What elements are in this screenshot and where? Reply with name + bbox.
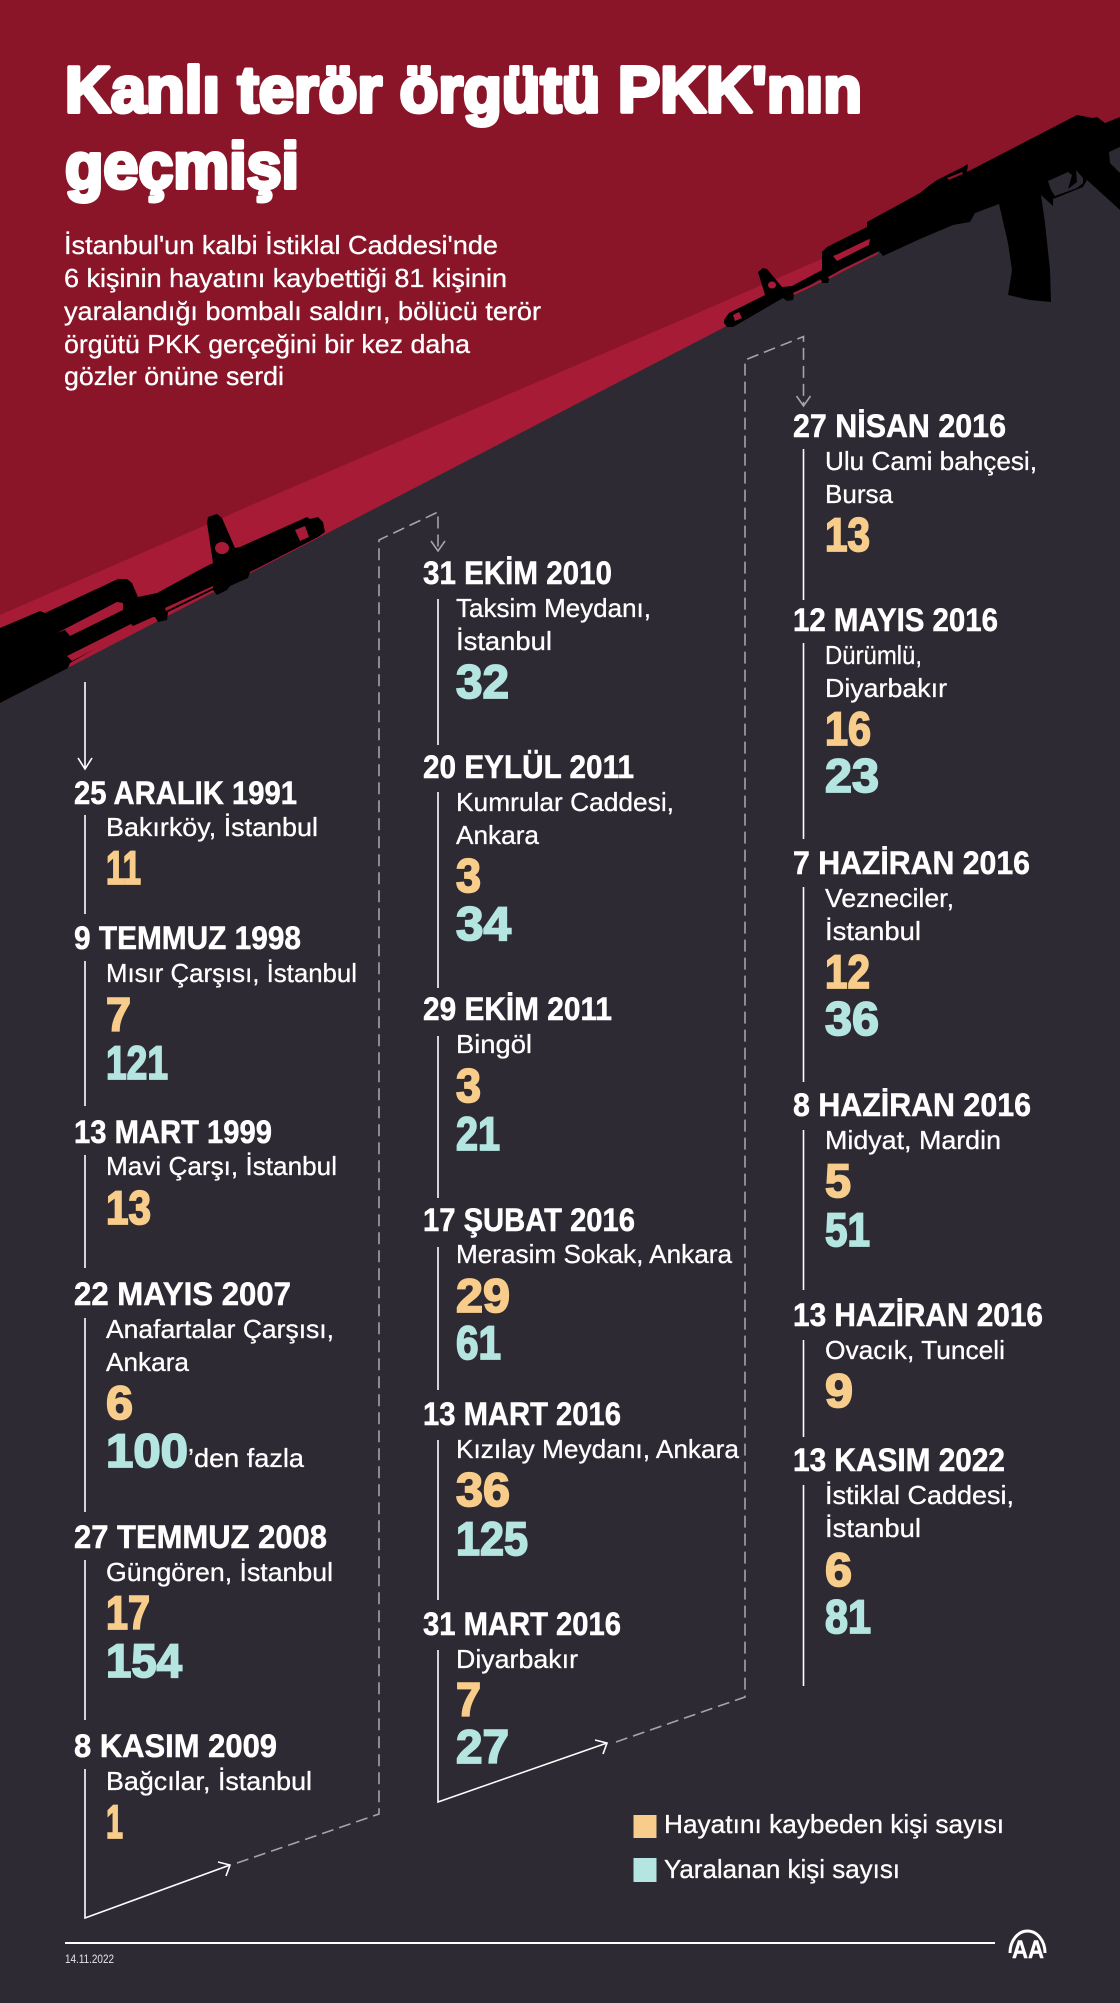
arrow: column 1 to column 2 connector	[85, 512, 445, 1918]
background: maroon top	[0, 0, 1120, 720]
event: 27 Temmuz 2008: 17	[106, 1586, 150, 1639]
legend: Yaralanan kişi sayısı	[664, 1854, 900, 1884]
column 2 timeline	[423, 555, 740, 1773]
event: 8 Haziran 2016: Midyat, Mardin	[825, 1125, 1001, 1155]
event: 13 Mart 2016: 125	[456, 1512, 528, 1565]
intro text block: gözler önüne serdi	[64, 361, 284, 391]
legend: Hayatını kaybeden kişi sayısı	[664, 1809, 1004, 1839]
event: 25 Aralık 1991: 25 ARALIK 1991	[74, 775, 297, 811]
event: 13 Kasım 2022: İstanbul	[825, 1513, 921, 1543]
title: Kanlı terör örgütü PKK'nın	[65, 53, 862, 126]
event: 13 Mart 1999	[74, 1114, 337, 1268]
event: 9 Temmuz 1998: 121	[106, 1036, 168, 1089]
event: 7 Haziran 2016: 36	[825, 992, 879, 1045]
event: 31 Ekim 2010: 32	[456, 655, 509, 708]
event: 9 Temmuz 1998: 9 TEMMUZ 1998	[74, 920, 301, 956]
background: bright red diagonal band	[0, 180, 1000, 720]
event: 13 Kasım 2022: 81	[825, 1590, 871, 1643]
event: 27 Temmuz 2008: 27 TEMMUZ 2008	[74, 1519, 327, 1555]
event: 13 Mart 1999: 13 MART 1999	[74, 1114, 272, 1150]
event: 12 Mayıs 2016: 16	[825, 702, 871, 755]
legend	[634, 1809, 1004, 1884]
event: 20 Eylül 2011: 3	[456, 849, 481, 902]
event: 17 Şubat 2016: Merasim Sokak, Ankara	[456, 1239, 733, 1269]
intro text block: yaralandığı bombalı saldırı, bölücü terör	[64, 296, 541, 326]
event: 29 Ekim 2011: Bingöl	[456, 1029, 532, 1059]
event: 12 Mayıs 2016	[793, 602, 998, 839]
event: 29 Ekim 2011: 29 EKİM 2011	[423, 991, 612, 1027]
event: 13 Mart 1999: 13	[106, 1181, 151, 1234]
event: 31 Mart 2016	[423, 1606, 621, 1773]
event: 31 Mart 2016: 7	[456, 1673, 481, 1726]
event: 13 Mart 2016: 36	[456, 1463, 510, 1516]
intro text block: 6 kişinin hayatını kaybettiği 81 kişinin	[64, 263, 507, 293]
event: 13 Mart 2016	[423, 1396, 740, 1600]
event: 31 Mart 2016: 27	[456, 1720, 509, 1773]
event: 20 Eylül 2011: Ankara	[456, 820, 540, 850]
intro text block: örgütü PKK gerçeğini bir kez daha	[64, 329, 471, 359]
event: 31 Ekim 2010: İstanbul	[456, 626, 552, 656]
event: 7 Haziran 2016	[793, 845, 1030, 1082]
event: 27 Nisan 2016: Ulu Cami bahçesi,	[825, 446, 1037, 476]
event: 25 Aralık 1991: Bakırköy, İstanbul	[106, 812, 318, 842]
event: 13 Mart 1999: Mavi Çarşı, İstanbul	[106, 1151, 337, 1181]
event: 13 Haziran 2016: Ovacık, Tunceli	[825, 1335, 1005, 1365]
event: 29 Ekim 2011: 21	[456, 1107, 500, 1160]
event: 7 Haziran 2016: İstanbul	[825, 916, 921, 946]
event: 22 Mayıs 2007: 100	[106, 1424, 188, 1477]
event: 22 Mayıs 2007	[74, 1276, 334, 1512]
column 1 timeline	[74, 775, 357, 1848]
icon: AA logo: AA	[1012, 1936, 1044, 1964]
event: 27 Nisan 2016: 27 NİSAN 2016	[793, 408, 1006, 444]
event: 29 Ekim 2011: 3	[456, 1059, 481, 1112]
event: 22 Mayıs 2007: Anafartalar Çarşısı,	[106, 1314, 334, 1344]
event: 13 Kasım 2022	[793, 1442, 1014, 1686]
event: 12 Mayıs 2016: 23	[825, 749, 879, 802]
event: 22 Mayıs 2007: Ankara	[106, 1347, 190, 1377]
event: 13 Mart 2016: 13 MART 2016	[423, 1396, 621, 1432]
event: 8 Haziran 2016: 5	[825, 1154, 851, 1207]
event: 17 Şubat 2016	[423, 1202, 733, 1390]
event: 9 Temmuz 1998: 7	[106, 988, 131, 1041]
event: 31 Mart 2016: 31 MART 2016	[423, 1606, 621, 1642]
event: 8 Haziran 2016	[793, 1087, 1031, 1290]
event: 25 Aralık 1991: 11	[106, 841, 141, 894]
event: 8 Haziran 2016: 8 HAZİRAN 2016	[793, 1087, 1031, 1123]
event: 8 Kasım 2009: 1	[106, 1795, 123, 1848]
intro text block: İstanbul'un kalbi İstiklal Caddesi'nde	[64, 230, 498, 260]
event: 27 Nisan 2016	[793, 408, 1037, 600]
event: 13 Mart 2016: Kızılay Meydanı, Ankara	[456, 1434, 740, 1464]
event: 27 Nisan 2016: Bursa	[825, 479, 894, 509]
event: 31 Ekim 2010	[423, 555, 651, 745]
event: 29 Ekim 2011	[423, 991, 612, 1198]
event: 31 Ekim 2010: Taksim Meydanı,	[456, 593, 651, 623]
arrow: column 2 to column 3 connector	[438, 336, 810, 1802]
event: 8 Kasım 2009	[74, 1728, 312, 1848]
event: 13 Haziran 2016: 13 HAZİRAN 2016	[793, 1297, 1043, 1333]
event: 22 Mayıs 2007: 6	[106, 1376, 133, 1429]
event: 17 Şubat 2016: 29	[456, 1269, 510, 1322]
event: 7 Haziran 2016: 7 HAZİRAN 2016	[793, 845, 1030, 881]
event: 7 Haziran 2016: 12	[825, 945, 870, 998]
event: 17 Şubat 2016: 17 ŞUBAT 2016	[423, 1202, 635, 1238]
event: 12 Mayıs 2016: 12 MAYIS 2016	[793, 602, 998, 638]
event: 7 Haziran 2016: Vezneciler,	[825, 883, 954, 913]
title	[65, 53, 862, 202]
icon: rifle silhouette left	[0, 514, 325, 703]
event: 20 Eylül 2011: 20 EYLÜL 2011	[423, 749, 634, 785]
event: 9 Temmuz 1998	[74, 920, 357, 1106]
event: 13 Kasım 2022: İstiklal Caddesi,	[825, 1480, 1014, 1510]
event: 8 Kasım 2009: 8 KASIM 2009	[74, 1728, 277, 1764]
event: 20 Eylül 2011: Kumrular Caddesi,	[456, 787, 674, 817]
arrow: timeline start	[78, 682, 92, 769]
event: 9 Temmuz 1998: Mısır Çarşısı, İstanbul	[106, 958, 357, 988]
event: 13 Haziran 2016: 9	[825, 1364, 853, 1417]
event: 20 Eylül 2011: 34	[456, 897, 511, 950]
event: 13 Kasım 2022: 6	[825, 1543, 852, 1596]
event: 27 Nisan 2016: 13	[825, 508, 870, 561]
event: 20 Eylül 2011	[423, 749, 674, 988]
event: 27 Temmuz 2008	[74, 1519, 333, 1720]
event: 27 Temmuz 2008: Güngören, İstanbul	[106, 1557, 333, 1587]
column 3 timeline	[793, 408, 1043, 1686]
event: 31 Ekim 2010: 31 EKİM 2010	[423, 555, 612, 591]
event: 22 Mayıs 2007: 22 MAYIS 2007	[74, 1276, 291, 1312]
event: 8 Haziran 2016: 51	[825, 1203, 870, 1256]
event: 13 Kasım 2022: 13 KASIM 2022	[793, 1442, 1005, 1478]
footer rule and date: 14.11.2022	[65, 1952, 114, 1966]
event: 12 Mayıs 2016: Diyarbakır	[825, 673, 947, 703]
icon: rifle silhouette right	[724, 115, 1120, 327]
event: 12 Mayıs 2016: Dürümlü,	[825, 640, 922, 670]
event: 13 Haziran 2016	[793, 1297, 1043, 1437]
event: 22 Mayıs 2007: ’den fazla	[188, 1443, 305, 1473]
event: 8 Kasım 2009: Bağcılar, İstanbul	[106, 1766, 312, 1796]
intro text block	[64, 230, 541, 391]
event: 31 Mart 2016: Diyarbakır	[456, 1644, 578, 1674]
title: geçmişi	[65, 129, 299, 202]
event: 17 Şubat 2016: 61	[456, 1316, 501, 1369]
event: 25 Aralık 1991	[74, 775, 318, 914]
event: 27 Temmuz 2008: 154	[106, 1634, 182, 1687]
